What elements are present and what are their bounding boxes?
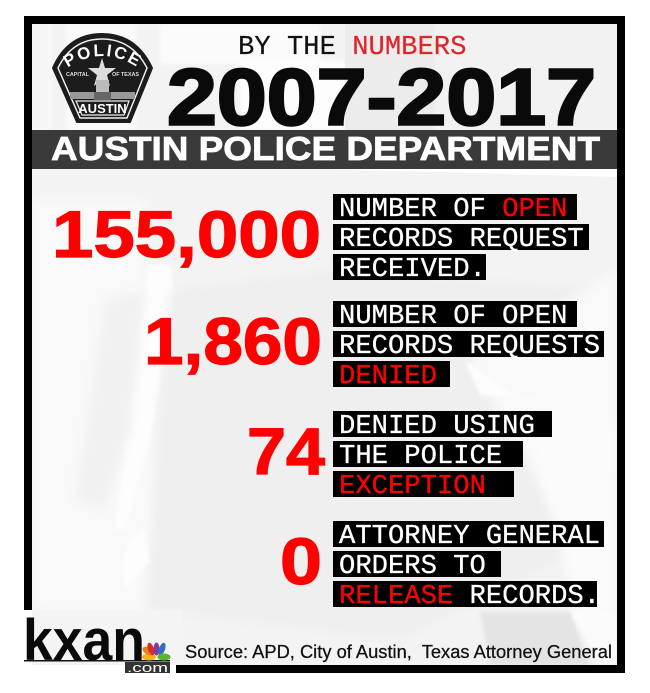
stat 3 description: DENIED USING [339, 411, 535, 442]
stat 2 description [333, 301, 604, 392]
stat 1 description [333, 194, 589, 285]
badge side text: CAPITAL [66, 72, 90, 78]
police badge logo: POLICE [62, 44, 142, 67]
badge arc text [62, 56, 144, 72]
stat 2 description: NUMBER OF OPEN [339, 301, 567, 332]
stat 4 description: ORDERS TO [339, 551, 486, 582]
stat 2 description: RECORDS REQUESTS [339, 331, 600, 362]
stat: 1,860: 1,860 [144, 304, 322, 378]
stat: 0: 0 [280, 524, 322, 598]
stat 3 description [333, 411, 552, 502]
badge side text: OF TEXAS [112, 72, 139, 78]
logo wordmark: kxan [23, 608, 145, 673]
stat 4 description: RELEASE RECORDS. [339, 581, 600, 612]
logo .com tag [125, 660, 170, 675]
police badge logo [52, 33, 153, 123]
title years: 2007-2017 [167, 52, 596, 142]
badge star [88, 58, 116, 86]
stat 1 description: NUMBER OF OPEN [339, 194, 567, 225]
stat 3 description: THE POLICE [339, 441, 502, 472]
stat: 155,000: 155,000 [52, 197, 321, 271]
badge capitol [70, 80, 135, 100]
department banner: AUSTIN POLICE DEPARTMENT [51, 130, 600, 167]
source credit: Source: APD, City of Austin, Texas Attorney General [185, 642, 612, 662]
stat: 74: 74 [247, 414, 325, 488]
logo .com tag: .com [127, 660, 168, 675]
badge side text [66, 72, 139, 78]
stat 1 description: RECORDS REQUEST [339, 224, 584, 255]
stat 3 description: EXCEPTION [339, 471, 486, 502]
icon: peacock [141, 642, 170, 660]
stat 2 description: DENIED [339, 361, 437, 392]
KXAN logo [0, 608, 170, 675]
subtitle: BY THE NUMBERS [238, 32, 466, 63]
stat 1 description: RECEIVED. [339, 254, 486, 285]
stat 4 description [333, 521, 604, 612]
stat 4 description: ATTORNEY GENERAL [339, 521, 600, 552]
badge name plate: AUSTIN [78, 101, 127, 116]
